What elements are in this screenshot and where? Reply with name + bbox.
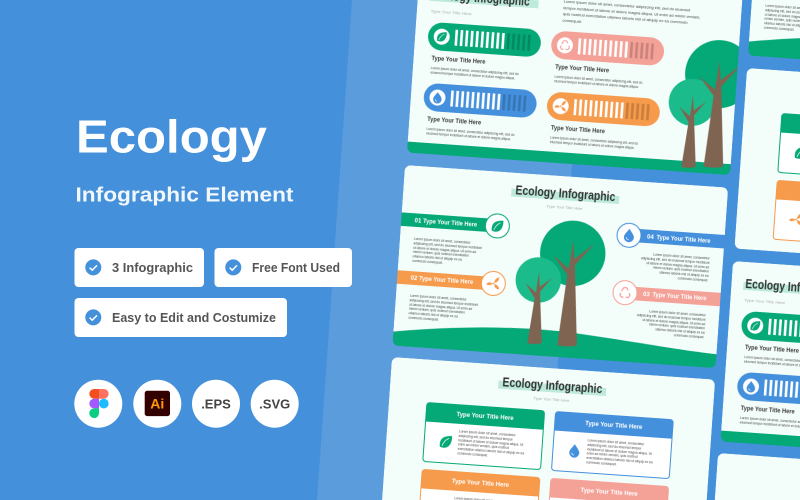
paragraph 04: Lorem ipsum dolor sit amet, consectetur [653,253,711,261]
text: green pill: eiusmod tempor incididunt ut labore et dolore magna aliqua. [430,71,515,80]
paragraph 03: minim veniam, quis nostrud exercitation [649,323,705,331]
pill: green [741,312,800,343]
paragraph 04: ut labore et dolore magna aliqua. Ut enim ad [646,261,709,269]
card: green: adipiscing elit, sed do eiusmod tempor [459,434,514,442]
title: Ecology Infographic [502,374,603,396]
text: orange pill: Type Your Title Here [551,126,606,135]
feature chip: 3 Infographic: 3 Infographic [112,260,193,275]
icon: EPS format [192,380,240,428]
panel: top slide with pill bars: tempor incididunt ut labore et dolore magna aliqua. Ut enim ad minim veniam, [563,5,701,20]
paragraph 02: adipiscing elit, sed do eiusmod tempor incididunt [409,298,478,307]
banner 04: Type Your Title Here [656,235,711,245]
panel: right slide with pills [720,261,800,464]
card: green: enim ad minim veniam, quis nostrud [458,443,509,450]
paragraph 03: commodo consequat. [674,333,704,339]
banner 02: Type Your Title Here [419,276,474,286]
panel: bottom-right slide [705,453,800,500]
paragraph 02: ut labore et dolore magna aliqua. Ut enim ad [409,302,472,311]
paragraph 01: Lorem ipsum dolor sit amet, consectetur [414,237,472,245]
text: blue pill: eiusmod tempor incididunt ut labore et dolore magna aliqua. [426,131,511,141]
text: pink pill [554,65,643,89]
icon: Figma [74,380,122,428]
title [498,377,606,402]
panel: bottom slide with cards [379,357,715,500]
card: blue: commodo consequat. [586,460,617,466]
pill: green leaf [427,22,542,58]
card: blue: Type Your Title Here [585,421,643,431]
banner 03 [612,280,721,306]
panel: top slide with pill bars: quis nostrud exercitation ullamco laboris nisi ut aliquip ex ea commodo [563,11,689,25]
card: pink [547,478,669,500]
paragraph 03: Lorem ipsum dolor sit amet, consectetur [649,309,707,317]
trees [668,40,739,168]
text: green pill [744,344,800,366]
text: pink pill: eiusmod tempor incididunt ut labore et dolore magna aliqua. [554,79,639,89]
feature chip: Easy to Edit and Costumize: Easy to Edit and Costumize [112,310,276,325]
text: green pill [430,56,520,81]
lighter diagonal band [317,0,584,500]
banner 02 [396,270,506,296]
card: orange [773,180,800,247]
card: orange: Type Your Title Here [452,479,510,489]
banner 04: 04 [647,235,655,241]
card: blue: incididunt ut labore et dolore magna aliqua. Ut [587,447,652,456]
paragraph 04: minim veniam, quis nostrud exercitation [653,266,709,274]
banner 01 [400,212,510,239]
paragraph 01: adipiscing elit, sed do eiusmod tempor incididunt [413,241,482,250]
text: green pill: Type Your Title Here [431,56,486,66]
ground hill [392,327,716,368]
card: blue [551,412,673,479]
text: blue pill: Type Your Title Here [740,406,795,416]
pill: blue drop [423,83,538,118]
paragraph 03: ut labore et dolore magna aliqua. Ut enim ad [642,318,705,326]
paragraph 03: adipiscing elit, sed do eiusmod tempor incididunt [637,313,706,322]
card: pink: Type Your Title Here [580,488,638,498]
panel: top slide with pill bars: consequat. [562,17,582,24]
card: blue: Lorem ipsum dolor sit amet, consectetur [588,438,645,446]
heading: Ecology: Ecology [76,110,267,162]
panel: right slide with pills: Type Your Title Here [744,297,786,305]
card: blue: adipiscing elit, sed do eiusmod tempor [587,443,643,451]
pill: pink recycle [550,30,665,66]
title: Type Your Title Here [546,203,583,211]
card: blue: enim ad minim veniam, quis nostrud [587,452,638,459]
text: blue pill [426,117,515,142]
feature chip: Free Font Used [214,248,352,287]
panel: middle slide with banners and trees [392,165,728,368]
title: Type Your Title Here [533,395,570,403]
icon: SVG format: .SVG [259,396,290,412]
title: Ecology Infographic [515,182,616,204]
banner 04 [616,222,725,248]
text: pink pill: Type Your Title Here [555,65,610,74]
panel: top-right slide: commodo consequat. [764,26,795,32]
text: green pill: Lorem ipsum dolor sit amet, consectetur adipiscing elit, sed do [431,66,519,76]
text: orange pill: Lorem ipsum dolor sit amet, consectetur adipiscing elit, sed do [550,136,638,146]
title [511,185,620,210]
paragraph 04: adipiscing elit, sed do eiusmod tempor incididunt [641,256,710,265]
feature chip: Easy to Edit and Costumize [74,298,287,337]
card: green: incididunt ut labore et dolore magna aliqua. Ut [458,438,523,447]
card: green: Type Your Title Here [456,412,514,422]
panel: top slide with pill bars [407,0,759,176]
icon: SVG format [251,380,299,428]
card: green: Lorem ipsum dolor sit amet, consectetur [459,429,517,437]
text: pink pill: Lorem ipsum dolor sit amet, consectetur adipiscing elit, sed do [554,75,643,85]
card: blue: exercitation ullamco laboris nisi ut aliquip ex ea [586,456,653,465]
feature chip: 3 Infographic [74,248,204,287]
paragraph 02: commodo consequat. [408,316,439,322]
card: green [423,403,545,470]
panel: right slide with cards [734,68,800,271]
text: blue pill [740,406,800,431]
paragraph 03: ullamco laboris nisi ut aliquip ex ea [655,327,705,335]
card: orange [418,469,540,500]
banner 03: Type Your Title Here [652,293,707,303]
paragraph 01: ullamco laboris nisi ut aliquip ex ea [413,254,462,262]
text: orange pill: eiusmod tempor incididunt ut labore et dolore magna aliqua. [550,140,635,150]
paragraph 01: minim veniam, quis nostrud exercitation [413,250,469,258]
banner 01: Type Your Title Here [423,219,478,229]
card: green: commodo consequat. [457,451,488,457]
pill: orange windmill [546,91,661,127]
paragraph 04: commodo consequat. [678,276,708,282]
text: orange pill [550,126,639,150]
subheading: Infographic Element: Infographic Element [76,184,294,206]
banner 03: 03 [643,292,651,299]
feature chip: Free Font Used: Free Font Used [252,260,340,275]
panel: top slide with pill bars: Type Your Title Here [431,8,473,16]
card: green [778,114,800,181]
icon: Adobe Illustrator: Ai [150,396,164,412]
paragraph 02: minim veniam, quis nostrud exercitation [409,307,465,315]
card: green: exercitation ullamco laboris nisi ut aliquip ex ea [458,447,524,456]
text: blue pill: Type Your Title Here [427,117,482,127]
text: blue pill: Lorem ipsum dolor sit amet, consectetur adipiscing elit, sed do [426,127,515,137]
paragraph 01: ut labore et dolore magna aliqua. Ut enim ad [413,246,476,254]
paragraph 01: commodo consequat. [412,259,443,265]
paragraph 02: Lorem ipsum dolor sit amet, consectetur [410,294,468,302]
icon: EPS format: .EPS [201,396,231,412]
banner 02: 02 [410,276,418,282]
trees [511,217,608,349]
paragraph 04: ullamco laboris nisi ut aliquip ex ea [659,271,709,278]
paragraph 02: ullamco laboris nisi ut aliquip ex ea [409,311,458,319]
panel: top-right slide [748,0,800,60]
banner 01: 01 [414,218,422,225]
pill: blue [737,372,800,404]
icon: Adobe Illustrator [133,380,181,428]
